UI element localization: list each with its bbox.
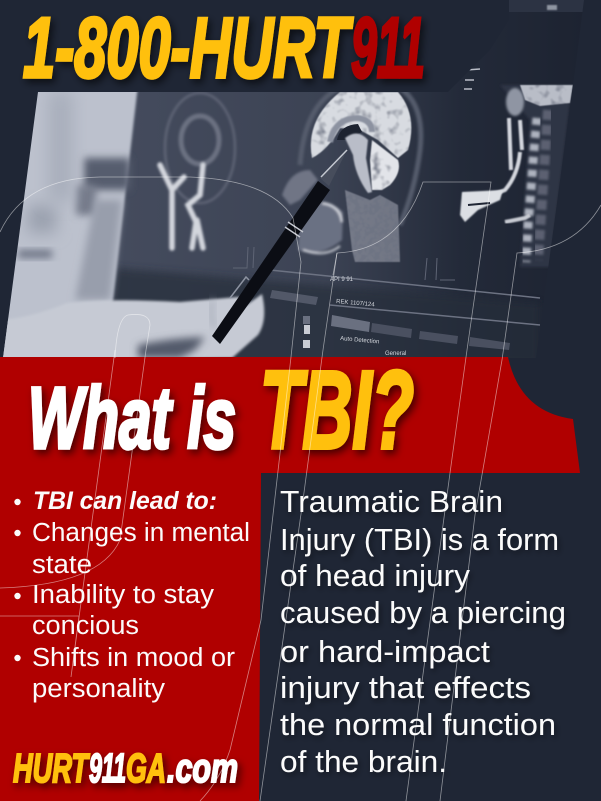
- monitor data panel: Auto Detection: [340, 336, 380, 345]
- body text: definition of TBI: the normal function: [280, 708, 556, 742]
- bullet list: effects of TBI: state: [32, 551, 92, 579]
- website: HURT911GA.com: GA: [126, 745, 166, 791]
- website: HURT911GA.com: HURT: [13, 745, 90, 791]
- MRI: corpus callosum: [330, 118, 372, 142]
- hand holding pen: [0, 294, 264, 362]
- bullet list: effects of TBI: concious: [32, 612, 139, 640]
- body text: definition of TBI: Injury (TBI) is a form: [280, 523, 559, 557]
- top right corner strip of the monitor: [509, 0, 589, 12]
- bullet list: effects of TBI: [14, 487, 250, 703]
- title: phone number: 1-800-HURT: [23, 1, 353, 96]
- MRI: head ring: [300, 86, 421, 225]
- MRI: brainstem: [345, 133, 372, 193]
- monitor data panel: REK 1107/124: [336, 299, 375, 308]
- MRI: neck: [345, 190, 400, 262]
- body text: definition of TBI: of the brain.: [280, 745, 447, 779]
- MRI: skull outline left: [165, 93, 235, 203]
- monitor tick marks: [233, 247, 455, 280]
- dark lower band of the monitor: [113, 266, 400, 357]
- bullet list: effects of TBI: Inability to stay: [32, 581, 214, 609]
- website: HURT911GA.com: 911: [89, 745, 126, 791]
- heading: What is TBI?: TBI?: [260, 349, 414, 472]
- title: phone number: 911: [351, 1, 425, 96]
- website: HURT911GA.com: [13, 745, 238, 791]
- bullet list: effects of TBI: Changes in mental: [32, 519, 250, 547]
- monitor data panel: [270, 270, 540, 357]
- MRI: face: [282, 170, 343, 253]
- body text: definition of TBI: injury that effects: [280, 671, 531, 705]
- body text: definition of TBI: of head injury: [280, 559, 471, 593]
- monitor data panel: General: [385, 351, 406, 357]
- monitor data panel: API 9 91: [330, 277, 354, 283]
- thin decorative outline overlay: [0, 177, 601, 801]
- MRI: blood vessels left: [160, 165, 203, 248]
- bullet list: effects of TBI: Shifts in mood or: [32, 644, 236, 672]
- website: HURT911GA.com: .com: [167, 745, 238, 791]
- body text: definition of TBI: or hard-impact: [280, 635, 491, 669]
- heading: What is TBI?: [28, 349, 414, 472]
- MRI: sagittal brain: [311, 92, 411, 158]
- body text: definition of TBI: caused by a piercing: [280, 596, 566, 630]
- photo: MRI scan on a monitor with hand and pen: [0, 0, 600, 365]
- pen: [212, 150, 347, 344]
- monitor side labels: [464, 5, 557, 89]
- MRI: cerebellum: [370, 140, 399, 190]
- panel: red banner and left column: [0, 357, 580, 801]
- body text: definition of TBI: Traumatic Brain: [280, 485, 503, 519]
- panel: navy text column: [261, 473, 601, 801]
- heading: What is TBI?: What is: [28, 370, 236, 467]
- blurred foreground at left of the photo: [0, 85, 138, 360]
- bullet list: effects of TBI: personality: [32, 675, 165, 703]
- MRI: spine at the right: [460, 85, 573, 267]
- bullet heading: TBI can lead to:: [33, 487, 217, 515]
- body text: definition of TBI: [280, 485, 566, 779]
